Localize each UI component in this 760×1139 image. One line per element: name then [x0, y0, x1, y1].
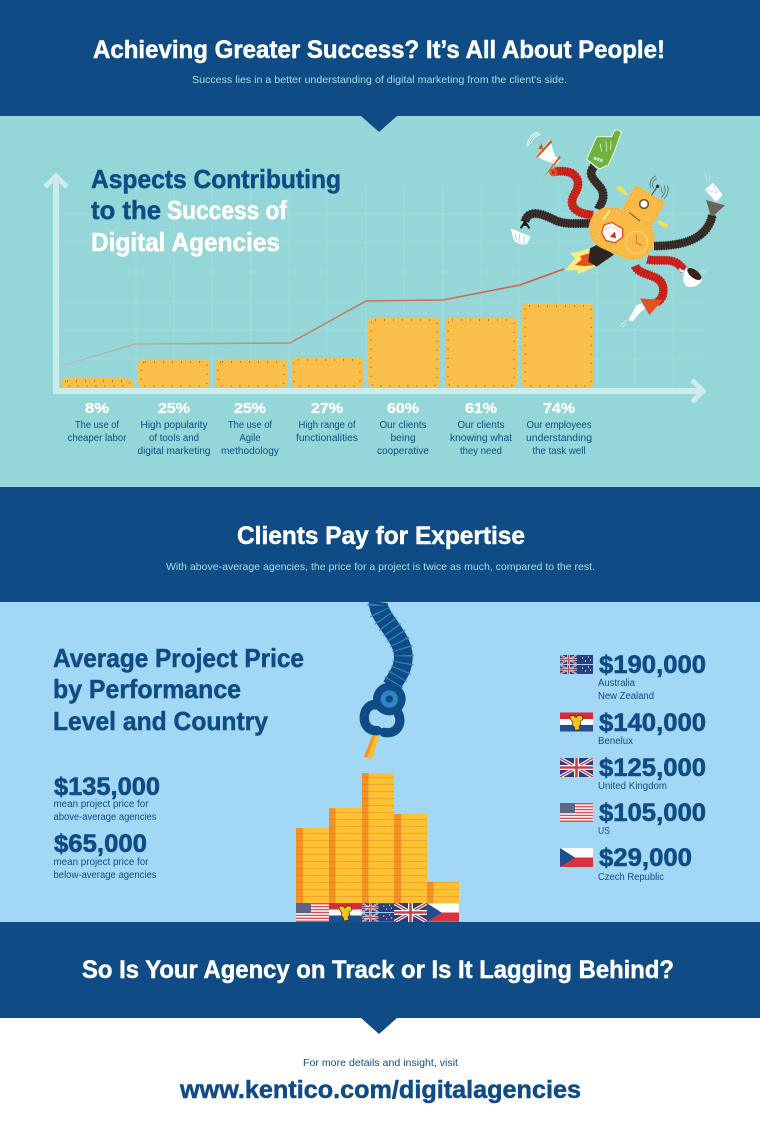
bar labels: 25%	[158, 400, 190, 417]
panel: average project price	[0, 602, 760, 922]
stat: US: $105,000	[599, 799, 706, 827]
panel: footer	[0, 1018, 760, 1139]
stat: above-average agencies: above-average agencies	[54, 812, 156, 823]
header notch	[361, 116, 397, 132]
icon: coffee cup	[680, 266, 706, 287]
bar labels: the task well	[532, 446, 586, 457]
stat: Australia New Zealand	[560, 651, 706, 702]
chart: coin stacks	[296, 773, 459, 904]
stat: US	[560, 799, 706, 837]
stat: below-average agencies: $65,000	[54, 830, 147, 858]
bar labels: High range of	[298, 420, 356, 431]
stat: Benelux	[560, 709, 706, 747]
bar chart	[61, 303, 594, 388]
heading: So Is Your Agency on Track or Is It Lagging Behind?	[82, 956, 674, 984]
bar labels: 8%	[85, 400, 109, 417]
stat: US: US	[598, 826, 610, 837]
stat: Czech Republic	[560, 844, 692, 883]
stat: above-average agencies	[54, 773, 160, 823]
rocket flame	[565, 248, 595, 274]
bar labels: The use of	[75, 420, 119, 431]
heading: Aspects Contributing	[91, 164, 341, 194]
heading: Success of	[167, 195, 287, 225]
bar labels: digital marketing	[138, 446, 210, 457]
icon: megaphone	[527, 132, 561, 178]
bar labels: 27%	[311, 400, 343, 417]
panel: on track banner	[0, 922, 760, 1018]
stat: above-average agencies: $135,000	[54, 773, 160, 801]
bar labels: Our clients	[380, 420, 426, 431]
heading: Digital Agencies	[91, 227, 280, 257]
icon: pliers and figure	[619, 298, 663, 327]
subtitle: Success lies in a better understanding of digital marketing from the client's side.	[192, 74, 567, 86]
bar labels: of tools and	[149, 433, 199, 444]
subheading: With above-average agencies, the price for a project is twice as much, compared to the rest.	[166, 561, 595, 573]
heading: to the	[91, 195, 161, 225]
chart flags	[296, 903, 459, 922]
stat: below-average agencies	[54, 830, 156, 881]
panel: success aspects chart	[0, 116, 760, 487]
stat: Benelux: Benelux	[598, 736, 633, 747]
chart axes	[45, 176, 703, 402]
icon: multi-armed robot	[511, 130, 725, 327]
rocket nozzle	[588, 244, 614, 267]
stat: Australia New Zealand: New Zealand	[598, 691, 654, 702]
heading: Average Project Price	[53, 643, 304, 673]
stat: United Kingdom: United Kingdom	[598, 781, 667, 792]
robot body	[582, 200, 662, 267]
title: Achieving Greater Success? It’s All About People!	[93, 36, 665, 64]
heading	[91, 164, 341, 257]
footer notch	[361, 1018, 397, 1034]
stat: Czech Republic: Czech Republic	[598, 872, 664, 883]
stat: Czech Republic: $29,000	[599, 844, 692, 872]
bar labels: 25%	[234, 400, 266, 417]
heading: Clients Pay for Expertise	[237, 522, 525, 550]
bar labels: The use of	[228, 420, 272, 431]
robot head	[616, 176, 668, 228]
bar labels: Our clients	[458, 420, 504, 431]
icon: foam finger: WEB	[593, 155, 604, 163]
bar labels: functionalities	[296, 433, 358, 444]
panel: header	[0, 0, 760, 116]
bar labels: 74%	[543, 400, 575, 417]
bar labels: cooperative	[377, 446, 429, 457]
bar labels: Agile	[240, 433, 261, 444]
bar labels: cheaper labor	[68, 433, 127, 444]
bar labels: 60%	[387, 400, 419, 417]
stat: below-average agencies: mean project price for	[54, 857, 149, 868]
bar labels: 61%	[465, 400, 497, 417]
bar labels: knowing what	[450, 433, 512, 444]
heading: Level and Country	[53, 706, 268, 736]
icon: foam finger	[587, 130, 621, 169]
stat: Australia New Zealand: $190,000	[599, 651, 706, 679]
stat: Australia New Zealand: Australia	[598, 678, 635, 689]
icon: envelope and funnel	[705, 173, 725, 216]
bar labels: methodology	[221, 446, 279, 457]
icon: crane arm with gold bar	[364, 602, 406, 759]
bar labels	[68, 400, 592, 457]
bar labels: Our employees	[526, 420, 592, 431]
panel: clients pay for expertise	[0, 487, 760, 602]
stat: below-average agencies: below-average agencies	[54, 870, 156, 881]
stat: Benelux: $140,000	[599, 709, 706, 737]
icon: basket	[511, 222, 531, 245]
bar labels: understanding	[526, 433, 592, 444]
bar labels: being	[390, 433, 416, 444]
stat: United Kingdom: $125,000	[599, 754, 706, 782]
stat: above-average agencies: mean project price for	[54, 799, 149, 810]
visit note: For more details and insight, visit	[303, 1057, 458, 1069]
website url: www.kentico.com/digitalagencies	[179, 1076, 581, 1104]
bar labels: they need	[460, 446, 502, 457]
bar labels: High popularity	[140, 420, 208, 431]
stat: United Kingdom	[560, 754, 706, 792]
heading: by Performance	[53, 674, 241, 704]
heading	[53, 643, 304, 736]
trend line	[64, 269, 564, 365]
